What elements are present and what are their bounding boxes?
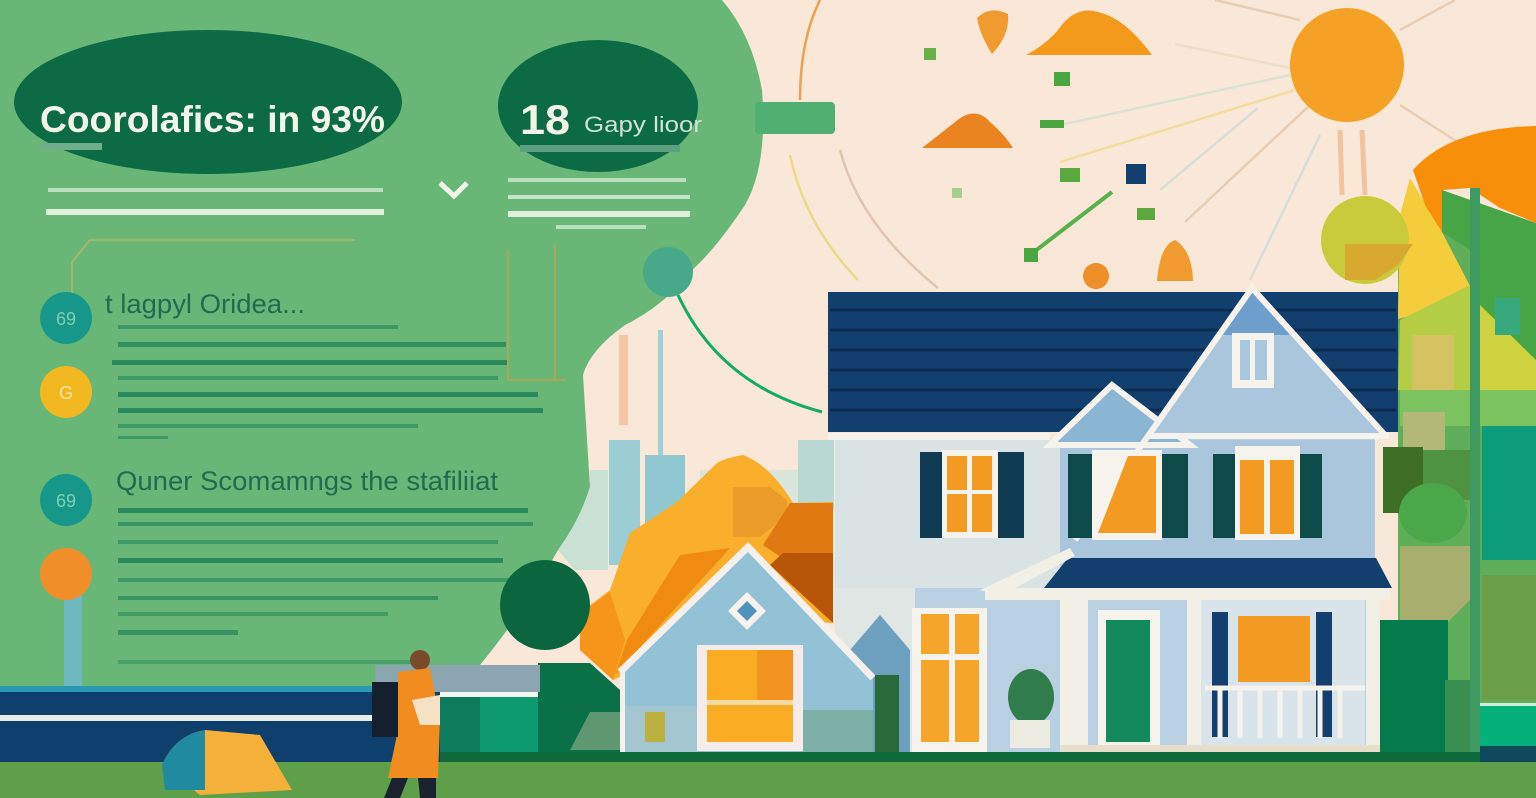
roof lines [830,310,1396,410]
attic window [1232,333,1274,388]
title text: Coorolafics: in 93% [40,99,385,140]
gable trim [1075,288,1385,540]
window 2 [1068,450,1188,540]
ground [0,762,1536,798]
list icon 1: 69 [56,309,76,329]
section heading 2: Quner Scomamngs the stafiliiat [116,466,499,496]
stat number: 18 [520,96,570,143]
list icon 2: G [59,383,73,403]
window 1 [920,450,1024,538]
potted shrub [1008,669,1054,725]
porch roof [1044,558,1392,588]
description left [46,188,384,215]
porch railing [1205,688,1365,738]
green trees [440,560,627,760]
sun rays [1060,0,1470,280]
foundation [1060,745,1380,759]
wheelbarrow figure [162,730,292,795]
decorative arcs [790,0,938,288]
icon: sun [1290,8,1404,122]
front door [1098,610,1160,745]
green connector tab [755,102,835,134]
roof [828,292,1398,432]
small house window [697,645,803,751]
arc connector [678,295,822,412]
tall window [912,608,987,753]
description right [508,178,690,229]
chevron [440,183,467,196]
window 3 [1213,446,1322,540]
list icon 3: 69 [56,491,76,511]
green panel [0,0,763,690]
porch columns [1060,600,1088,755]
list icon 2 [40,366,92,418]
stat label: Gapy lioor [584,112,702,137]
side shrub [875,675,899,753]
icon: top small globe [643,247,693,297]
house wall [835,438,1375,758]
section heading 1: t lagpyl Oridea... [105,289,305,319]
list icon 3 [40,474,92,526]
lower gable [1050,385,1190,445]
title badge [14,30,402,174]
orange tree [580,455,833,680]
city skyline [558,330,834,570]
frame lines [72,240,566,380]
stat badge [498,40,702,172]
list icon 1 [40,292,92,344]
small house [620,547,873,752]
section 2 text lines [118,508,533,664]
hedge strip [440,752,1480,762]
blue wall strip [0,665,540,762]
small house vent [728,592,766,630]
section 1 text lines [112,325,543,439]
side blue block [850,615,910,752]
upper gable [1149,290,1385,435]
eave [828,433,1050,440]
right side foliage [1321,126,1536,762]
main house [828,288,1398,759]
icon: clouds and drops [922,10,1193,289]
list icon 4 [40,548,92,686]
person [372,650,440,798]
porch interior [1200,600,1365,750]
